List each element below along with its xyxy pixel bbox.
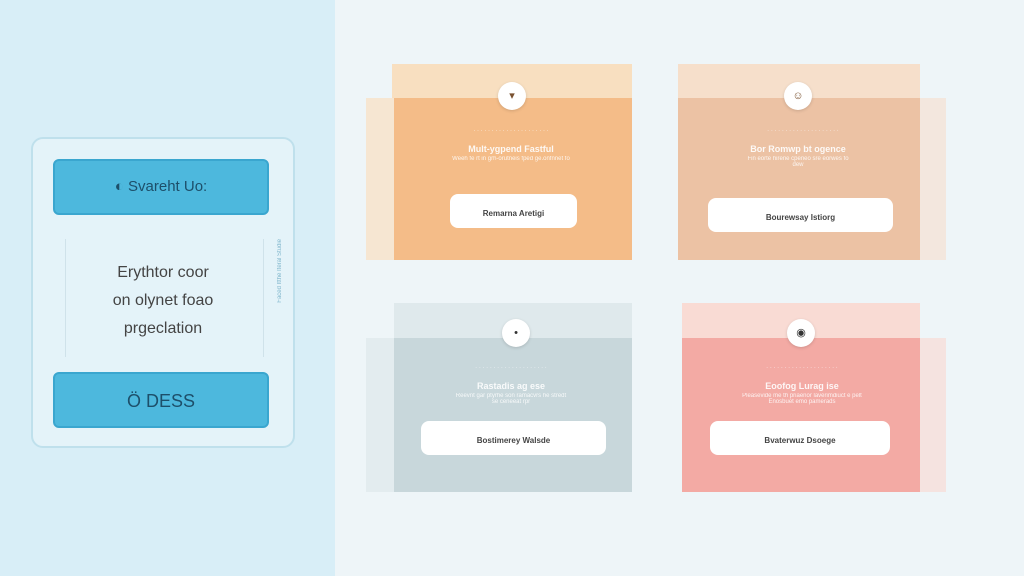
card 3 grey: se ceneeat rpr xyxy=(492,399,530,405)
button: Svareht Uo: ◐ Svareht Uo: xyxy=(115,178,207,195)
card 4 pink: Eoofog Lurag ise xyxy=(765,381,839,391)
card 3 grey: Rastadis ag ese xyxy=(477,381,545,391)
button: Svareht Uo xyxy=(53,159,269,215)
button: Bourewsay Istiorg xyxy=(766,213,835,222)
button: Remarna Aretigi xyxy=(483,209,544,218)
button xyxy=(421,421,606,455)
card 1 orange xyxy=(366,64,632,260)
icon xyxy=(502,319,530,347)
card 1 orange: Weeh fe rt in grh-orutneis fped ge.onfnnet fo xyxy=(452,156,570,162)
button xyxy=(450,194,577,228)
left panel background xyxy=(0,0,335,576)
card 2 peach: Bor Romwp bt ogence xyxy=(750,144,846,154)
button xyxy=(708,198,893,232)
card 2 peach xyxy=(678,64,946,260)
text block: prgeclation xyxy=(124,320,202,337)
card 4 pink: Enosbuet emo pamerads xyxy=(768,399,836,405)
icon: ▾ xyxy=(509,90,515,102)
text block: Erythtor coor xyxy=(117,264,209,281)
button: DESS: Ö DESS xyxy=(127,391,195,411)
card 2 peach: dew xyxy=(792,162,804,168)
text block xyxy=(113,264,213,337)
icon xyxy=(787,319,815,347)
card 2 peach: · · · · · · · · · · · · · · · · · · · · xyxy=(767,128,839,134)
card 2 peach: Fin eorte hirene cpeneo sre eorwes fo xyxy=(747,156,849,162)
icon: • xyxy=(514,327,518,339)
icon xyxy=(498,82,526,110)
icon xyxy=(784,82,812,110)
card 4 pink xyxy=(682,303,946,492)
card 3 grey: · · · · · · · · · · · · · · · · · · · · xyxy=(475,365,547,371)
icon: ◉ xyxy=(796,327,806,339)
button xyxy=(710,421,890,455)
left card xyxy=(31,137,295,448)
button: Bostimerey Walsde xyxy=(477,436,550,445)
card 1 orange: Mult-ygpend Fastful xyxy=(468,144,554,154)
card 1 orange: · · · · · · · · · · · · · · · · · · · · · xyxy=(473,128,549,134)
text block: on olynet foao xyxy=(113,292,213,309)
card 3 grey xyxy=(366,303,632,492)
icon: ☺ xyxy=(792,90,804,102)
button: DESS xyxy=(53,372,269,428)
card 3 grey: Reevnt gar ptyrhe son ramacvrs he stredt xyxy=(456,393,566,399)
card 4 pink: · · · · · · · · · · · · · · · · · · · · xyxy=(766,365,838,371)
button: Bvaterwuz Dsoege xyxy=(764,436,836,445)
vertical side text: Faced Itthe Iteral Studie xyxy=(277,239,283,303)
card 4 pink: Pleasevide me th priaenor laverimdiuct e pelt xyxy=(742,393,862,399)
